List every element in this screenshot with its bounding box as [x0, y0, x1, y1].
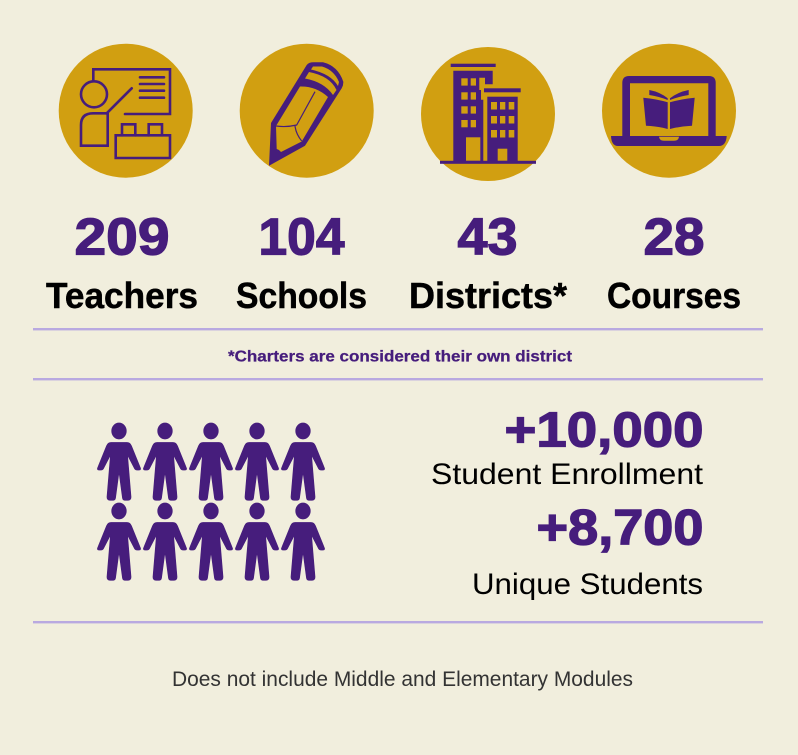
icon: laptop with book — [602, 44, 736, 178]
stat: 209 teachers: Teachers — [46, 275, 198, 316]
stat: 104 schools — [236, 208, 367, 316]
stat: unique students: +8,700 — [536, 500, 704, 556]
stat: 28 courses: Courses — [607, 275, 741, 316]
stat: student enrollment: +10,000 — [504, 404, 704, 458]
stat: 104 schools: Schools — [236, 275, 367, 316]
stat: unique students: Unique Students — [472, 568, 703, 601]
icon: buildings — [421, 47, 555, 181]
note: exclusions: Does not include Middle and Elementary Modules — [172, 668, 633, 691]
stat: 28 courses — [607, 208, 741, 316]
icon: teacher at board — [59, 44, 193, 178]
stat: 209 teachers — [46, 208, 198, 316]
stat: 43 districts: 43 — [458, 208, 518, 266]
icon: pencil — [240, 44, 374, 178]
stat: 104 schools: 104 — [258, 208, 345, 266]
icon: row of ten students — [97, 423, 325, 580]
stat: student enrollment — [431, 404, 704, 491]
stat: unique students — [472, 500, 704, 601]
footnote: charters: *Charters are considered their own district — [228, 348, 572, 366]
stat: 209 teachers: 209 — [74, 208, 170, 266]
stat: 28 courses: 28 — [644, 208, 704, 266]
stat: 43 districts — [409, 208, 567, 316]
stat: student enrollment: Student Enrollment — [431, 458, 704, 491]
stat: 43 districts: Districts* — [409, 275, 567, 316]
